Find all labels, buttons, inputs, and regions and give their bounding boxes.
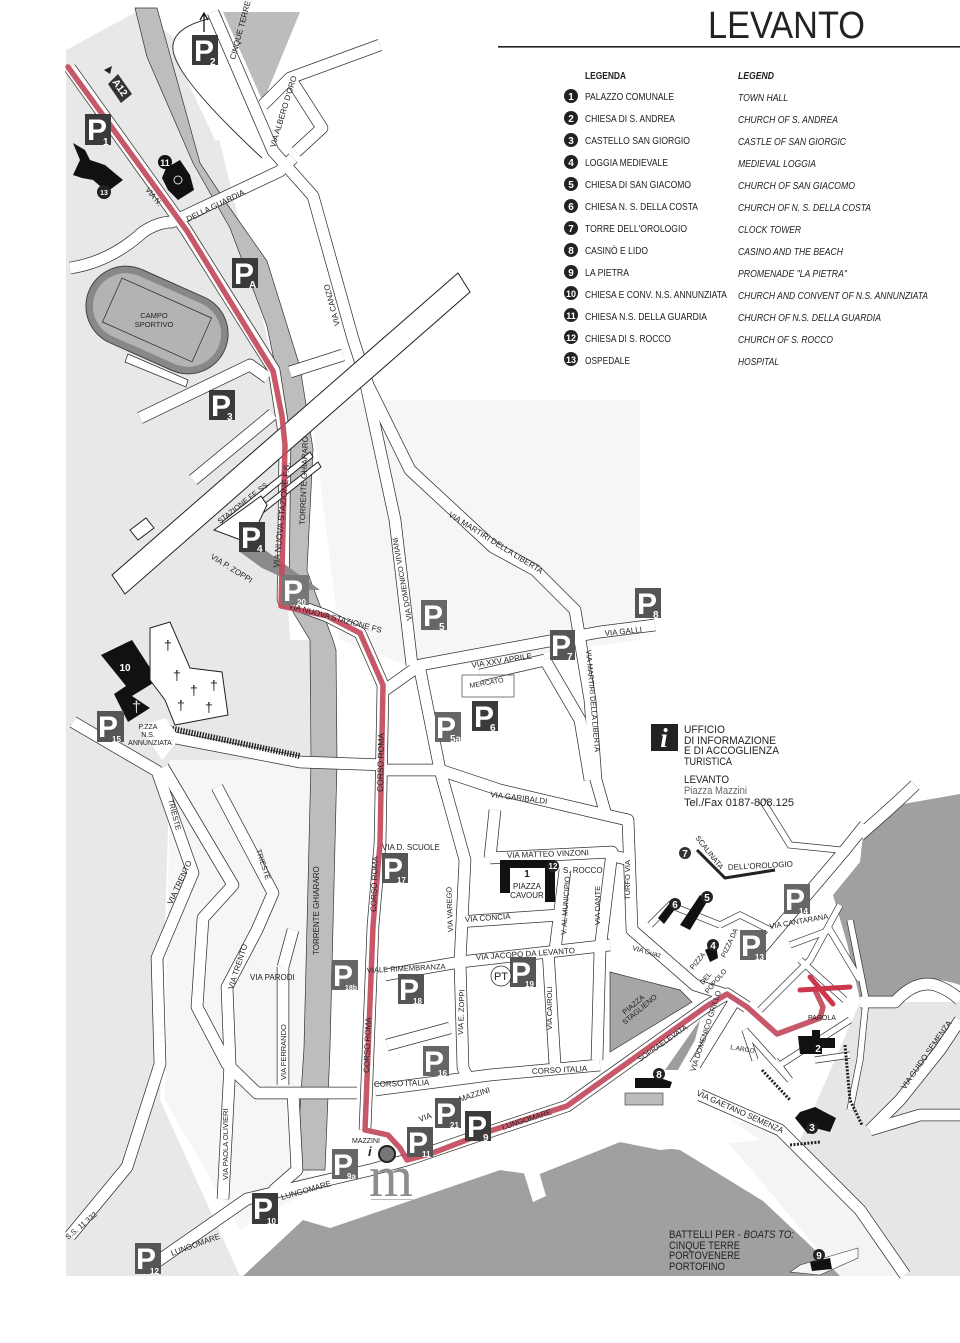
street labels: VIA CONCIA xyxy=(465,912,511,924)
street labels: VIA xyxy=(418,1111,433,1124)
legend row 9: 9 xyxy=(568,268,574,279)
street labels: VIA MARTIRI DELLA LIBERTA xyxy=(584,649,602,752)
info icon xyxy=(651,723,678,753)
piazza n.s. annunziata: N.S. xyxy=(141,732,155,739)
building 2 xyxy=(798,1030,835,1054)
street labels: CORSO ITALIA xyxy=(532,1064,588,1076)
legend row 7: TORRE DELL'OROLOGIO xyxy=(585,223,687,235)
cemetery crosses xyxy=(132,622,228,725)
boats text: PORTOFINO xyxy=(669,1261,725,1273)
legend row 5 xyxy=(564,177,855,192)
legend row 7: 7 xyxy=(568,224,574,235)
building 13: ospedale xyxy=(73,143,123,192)
post office badge xyxy=(491,966,511,986)
street labels: MAZZINI xyxy=(352,1138,380,1145)
street labels: VIA NUOVA STAZIONE F.S. xyxy=(271,462,292,568)
street labels: V. AL MUNICIPIO xyxy=(559,876,572,935)
legend row 12: CHURCH OF S. ROCCO xyxy=(738,334,833,346)
street labels: CINQUE TERRE xyxy=(228,0,253,61)
p3: P xyxy=(211,390,231,423)
street labels: PIAZZA xyxy=(621,993,646,1017)
info text: TURISTICA xyxy=(684,756,733,768)
cemetery crosses: † xyxy=(164,637,172,653)
marker 9: 9 xyxy=(816,1251,822,1262)
street labels: PAROLA xyxy=(808,1015,836,1022)
legend row 1: TOWN HALL xyxy=(738,92,788,104)
legend row 11: CHURCH OF N.S. DELLA GUARDIA xyxy=(738,312,881,324)
building number markers xyxy=(97,155,825,1262)
p5a: P xyxy=(436,712,456,745)
castle wall stairs xyxy=(762,1045,862,1145)
legend row 10: 10 xyxy=(566,289,576,299)
street labels: CORSO ITALIA xyxy=(374,1078,430,1089)
legend row 11: CHIESA N.S. DELLA GUARDIA xyxy=(585,311,707,323)
marker 12: 12 xyxy=(549,862,558,871)
legend row 2: CHURCH OF S. ANDREA xyxy=(738,114,838,126)
sea xyxy=(243,794,960,1276)
stairs to the piazza xyxy=(164,727,300,756)
info point and logo: i xyxy=(368,1144,372,1159)
p6: 6 xyxy=(490,723,496,734)
p7: P xyxy=(551,630,571,663)
marker 13: 13 xyxy=(100,190,108,197)
legend row 8: CASINO AND THE BEACH xyxy=(738,246,843,258)
marker 6 xyxy=(669,898,681,911)
marker 4 xyxy=(707,939,719,952)
marker 2: 2 xyxy=(815,1044,821,1055)
marker 4: 4 xyxy=(710,941,716,952)
street labels: VIA GALLI xyxy=(604,625,642,638)
boats text: PORTOVENERE xyxy=(669,1250,740,1262)
boats text: CINQUE TERRE xyxy=(669,1240,740,1252)
street labels: DEL xyxy=(699,971,713,986)
marker 5 xyxy=(701,891,713,904)
street labels: VIA XXV APRILE xyxy=(471,652,532,670)
p20: P xyxy=(283,575,303,608)
legend row 1: PALAZZO COMUNALE xyxy=(585,91,674,103)
street labels: LUNGOMARE xyxy=(501,1107,553,1132)
legend row 3: CASTLE OF SAN GIORGIC xyxy=(738,136,846,148)
legend row 3 xyxy=(564,133,846,148)
building 6 xyxy=(658,900,678,924)
park beside soprelevata xyxy=(665,1020,700,1070)
marker 8 xyxy=(653,1068,665,1081)
legend row 9: LA PIETRA xyxy=(585,267,629,279)
p10: 10 xyxy=(267,1217,276,1226)
info text: UFFICIO xyxy=(684,724,725,736)
street labels: LUNGOMARE xyxy=(280,1179,332,1202)
street labels: PIZZA xyxy=(689,951,707,971)
p8: 8 xyxy=(653,610,659,621)
building 4 xyxy=(705,944,718,962)
p4: P xyxy=(241,522,261,555)
legend row 13: OSPEDALE xyxy=(585,355,630,367)
p17: 17 xyxy=(397,876,406,885)
building 5 xyxy=(680,895,708,930)
p13: P xyxy=(741,930,761,963)
info text: Piazza Mazzini xyxy=(684,785,747,797)
marker 8: 8 xyxy=(656,1070,662,1081)
legend row 4: 4 xyxy=(568,158,574,169)
street labels: TURFO VIA xyxy=(623,860,632,900)
street labels: VIA MARTIRI DELLA LIBERTA xyxy=(447,510,545,576)
p9: P xyxy=(467,1111,487,1144)
building 9: la pietra xyxy=(790,1248,858,1275)
legend row 3: 3 xyxy=(568,136,574,147)
street labels: CORSO ROMA xyxy=(362,1017,373,1073)
legend row 4 xyxy=(564,155,816,170)
a12 highway badge: A12 xyxy=(110,77,129,99)
marker 7 xyxy=(679,847,691,860)
street labels: L.ARGO xyxy=(730,1044,755,1055)
legend headers xyxy=(585,70,774,82)
red walking route xyxy=(68,67,850,1160)
p2: 2 xyxy=(210,57,216,68)
p9: 9 xyxy=(483,1133,489,1144)
street labels: VIA GARIBALDI xyxy=(490,790,548,806)
tourist information block xyxy=(651,723,794,809)
legend row 10: CHIESA E CONV. N.S. ANNUNZIATA xyxy=(585,289,727,301)
p6: P xyxy=(474,701,494,734)
p9a: P xyxy=(333,1149,353,1182)
street labels: VIA MATTEO VINZONI xyxy=(507,848,589,860)
p18: P xyxy=(399,974,419,1007)
piazza cavour label: PIAZZA xyxy=(513,882,542,891)
street labels: VIA PARODI xyxy=(250,973,295,982)
street labels: TRIESTE xyxy=(166,798,183,831)
p21: 21 xyxy=(450,1121,459,1130)
p18b: 18b xyxy=(345,985,357,992)
piazza n.s. annunziata xyxy=(128,718,180,760)
street labels: SOPRAELEVATA xyxy=(636,1023,689,1064)
p18: 18 xyxy=(413,997,422,1006)
p18b: P xyxy=(333,960,353,993)
street labels: LUNGOMARE xyxy=(170,1232,221,1258)
legend row 1 xyxy=(564,89,788,104)
street labels: VIA GAETANO SEMENZA xyxy=(695,1089,785,1135)
legend row 8: CASINÒ E LIDO xyxy=(585,244,648,257)
p5: P xyxy=(423,600,443,633)
street labels: MAZZINI xyxy=(458,1085,491,1104)
legend headers: LEGENDA xyxy=(585,70,626,82)
street labels: VIA CAIROLI xyxy=(545,986,554,1030)
piazza cavour label: CAVOUR xyxy=(510,891,544,900)
street labels: CORSO ROMA xyxy=(369,856,380,912)
marker 5: 5 xyxy=(704,893,710,904)
p17: P xyxy=(383,853,403,886)
legend row 12: 12 xyxy=(566,333,576,343)
p3: 3 xyxy=(227,412,233,423)
legend row 13 xyxy=(564,352,779,368)
street labels: VIA FERRANDO xyxy=(279,1024,288,1080)
cemetery crosses: † xyxy=(177,697,185,713)
building 10: convent annunziata xyxy=(101,640,158,722)
street labels: S.S. 11 332 xyxy=(64,1210,99,1242)
legend row 2 xyxy=(564,111,838,126)
cemetery crosses: † xyxy=(210,677,218,693)
p9a: 9a xyxy=(347,1172,356,1181)
street labels: TORRENTE GHIARARO xyxy=(312,866,321,955)
p5a: 5a xyxy=(450,734,462,745)
street labels: DELL'OROLOGIO xyxy=(728,860,793,872)
building 1: piazza cavour palazzo comunale xyxy=(500,860,555,902)
street labels: VIA P. ZOPPI xyxy=(209,552,254,585)
building 3 xyxy=(795,1107,836,1134)
boats text xyxy=(669,1229,794,1273)
legend row 4: MEDIEVAL LOGGIA xyxy=(738,158,816,170)
p2 field boundary xyxy=(173,16,262,158)
street labels: PIZZA DA xyxy=(720,927,740,959)
street labels: TORRENTE GHIARARO xyxy=(298,436,310,525)
street labels: POPOLO xyxy=(704,968,729,995)
legend row 6: CHURCH OF N. S. DELLA COSTA xyxy=(738,202,871,214)
p21: P xyxy=(436,1098,456,1131)
cemetery crosses: † xyxy=(173,667,181,683)
street labels: VIA D. SCUOLE xyxy=(382,843,440,852)
p1: P xyxy=(87,114,107,147)
legend headers: LEGEND xyxy=(738,70,774,82)
parking lot near station xyxy=(240,545,320,590)
marker 6: 6 xyxy=(672,900,678,911)
street labels: S. ROCCO xyxy=(563,866,603,875)
piazza n.s. annunziata: ANNUNZIATA xyxy=(128,740,172,747)
post office badge: PT xyxy=(494,971,508,983)
street labels: CORSO ROMA xyxy=(375,733,386,792)
street labels: VIA ALBERO D'ORO xyxy=(268,75,299,149)
a12 highway badge xyxy=(104,66,132,103)
legend row 7 xyxy=(564,221,801,236)
legend row 7: CLOCK TOWER xyxy=(738,224,801,236)
street labels: MERCATO xyxy=(469,677,505,690)
marker 12 xyxy=(547,860,559,872)
street labels: DELLA GUARDIA xyxy=(185,188,247,224)
legend row 6: CHIESA N. S. DELLA COSTA xyxy=(585,201,698,213)
p12: P xyxy=(136,1243,156,1276)
street labels: VIA E. ZOPPI xyxy=(456,989,467,1035)
street labels: TRIESTE xyxy=(254,848,272,881)
street labels: VIA CANZO xyxy=(322,283,342,327)
street labels: VIA PAOLA OLIVIERI xyxy=(221,1108,230,1180)
river: torrente ghiararo xyxy=(135,8,337,1170)
piazza cavour label xyxy=(510,882,544,900)
legend xyxy=(564,70,928,368)
title rule xyxy=(498,46,960,48)
p5: 5 xyxy=(439,622,445,633)
info point and logo: m xyxy=(369,1144,413,1209)
info text: LEVANTO xyxy=(684,774,729,786)
legend row 4: LOGGIA MEDIEVALE xyxy=(585,157,668,169)
info text: Tel./Fax 0187-808.125 xyxy=(684,797,794,809)
parking signs xyxy=(85,35,810,1276)
info text: DI INFORMAZIONE xyxy=(684,735,776,747)
marker 9 xyxy=(813,1249,825,1262)
p12: 12 xyxy=(150,1267,159,1276)
street labels: VIA CANTARANA xyxy=(769,912,829,931)
info text: E DI ACCOGLIENZA xyxy=(684,745,780,757)
legend row 2: CHIESA DI S. ANDREA xyxy=(585,113,675,125)
legend row 11: 11 xyxy=(566,311,576,321)
street labels: VIA NUOVA STAZIONE FS xyxy=(287,601,383,635)
legend row 6 xyxy=(564,199,871,214)
buildings and monuments xyxy=(73,143,858,1275)
p13: 13 xyxy=(755,953,764,962)
legend row 12 xyxy=(564,330,833,346)
legend row 13: HOSPITAL xyxy=(738,356,779,368)
street labels: VIA JACOPO DA LEVANTO xyxy=(476,946,575,962)
marker 11 xyxy=(158,155,172,169)
scalinata dell'orologio stairs xyxy=(697,850,775,878)
info text xyxy=(684,724,794,809)
street labels: VIA N. xyxy=(143,186,164,208)
marker 7: 7 xyxy=(682,849,688,860)
piazza n.s. annunziata: P.ZZA xyxy=(139,724,158,731)
cemetery crosses: † xyxy=(132,699,141,716)
gray wedge near via albero d'oro xyxy=(223,12,300,102)
street labels: VIALE RIMEMBRANZA xyxy=(367,962,446,975)
piazza stagliero xyxy=(610,972,692,1052)
stadium: campo sportivo: CAMPO xyxy=(140,311,168,320)
marker 3 xyxy=(806,1122,818,1134)
direction arrow near p2 xyxy=(200,13,208,32)
p-a: P xyxy=(234,258,254,291)
info icon: i xyxy=(660,723,668,753)
legend row 9 xyxy=(564,265,848,280)
street labels: VIA TRENTO xyxy=(226,943,250,991)
legend row 1: 1 xyxy=(568,92,574,103)
p11: P xyxy=(408,1127,428,1160)
stadium: campo sportivo xyxy=(73,253,241,387)
legend row 8: 8 xyxy=(568,246,574,257)
cemetery crosses: † xyxy=(205,699,213,715)
cemetery crosses: † xyxy=(190,682,198,698)
legend row 5: CHURCH OF SAN GIACOMO xyxy=(738,180,855,192)
p2: P xyxy=(194,35,214,68)
p14: 14 xyxy=(799,907,808,916)
street labels: VIA GUIDO SEMENZA xyxy=(899,1018,954,1091)
legend row 5: 5 xyxy=(568,180,574,191)
p4: 4 xyxy=(257,544,263,555)
p20: 20 xyxy=(297,598,306,607)
beach xyxy=(330,1090,760,1228)
p-a: A xyxy=(249,280,256,291)
building 8: casino xyxy=(635,1078,672,1088)
pier xyxy=(523,1165,546,1202)
street labels: VIA DOMENICO GRILLO xyxy=(688,989,723,1073)
legend row 2: 2 xyxy=(568,114,574,125)
p1: 1 xyxy=(103,137,109,148)
street labels: VIA TRENTO xyxy=(166,859,194,906)
p10: P xyxy=(253,1193,273,1226)
legend row 6: 6 xyxy=(568,202,574,213)
street labels: VIA DANTE xyxy=(593,886,602,925)
marker 13 xyxy=(97,185,111,199)
p15: 15 xyxy=(112,735,121,744)
title: LEVANTO xyxy=(708,5,865,47)
p7: 7 xyxy=(567,652,573,663)
p11: 11 xyxy=(422,1150,431,1159)
legend row 13: 13 xyxy=(566,355,576,365)
marker 10: 10 xyxy=(119,663,131,674)
street labels: VIA VAREGO xyxy=(444,886,455,932)
street labels: STAGLIENO xyxy=(621,992,659,1027)
legend row 11 xyxy=(564,308,881,324)
street labels: SCALINATA xyxy=(693,834,725,871)
legend row 3: CASTELLO SAN GIORGIO xyxy=(585,135,690,147)
p15: P xyxy=(98,711,118,744)
p8: P xyxy=(637,588,657,621)
legend row 5: CHIESA DI SAN GIACOMO xyxy=(585,179,691,191)
street labels: STAZIONE FF. SS. xyxy=(216,479,271,526)
legend row 12: CHIESA DI S. ROCCO xyxy=(585,333,671,345)
p16: 16 xyxy=(438,1069,447,1078)
building 11: church of n.s. della guardia xyxy=(162,160,194,200)
legend row 10 xyxy=(564,286,928,302)
street labels: VIA Guaz xyxy=(631,945,662,960)
boats text: BATTELLI PER - BOATS TO: xyxy=(669,1229,794,1241)
white field around p2 xyxy=(173,14,270,150)
p19: P xyxy=(511,957,531,990)
p16: P xyxy=(424,1046,444,1079)
legend row 9: PROMENADE "LA PIETRA" xyxy=(738,268,848,280)
p14: P xyxy=(785,884,805,917)
marker 3: 3 xyxy=(809,1123,815,1134)
p19: 19 xyxy=(525,980,534,989)
street labels: VIA DOMENICO VIVIANI xyxy=(391,537,414,621)
marker 11: 11 xyxy=(160,158,170,168)
stadium: campo sportivo: SPORTIVO xyxy=(135,320,173,329)
marker 1: 1 xyxy=(524,869,530,880)
legend row 8 xyxy=(564,243,843,258)
railway and station xyxy=(112,273,470,594)
